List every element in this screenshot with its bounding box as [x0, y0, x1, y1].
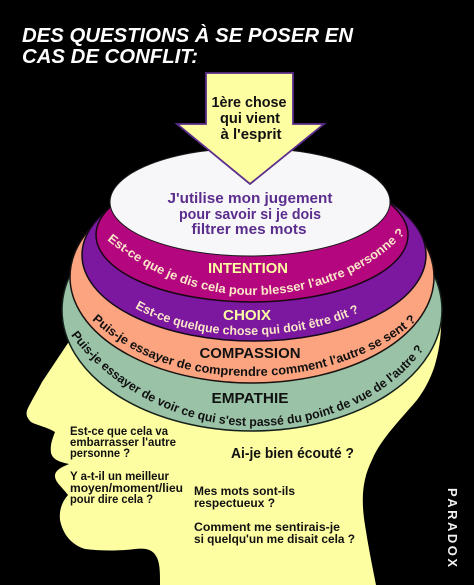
compassion label: COMPASSION [200, 346, 300, 362]
head shape [27, 280, 441, 585]
layer: intention [96, 168, 408, 302]
arrow text: 1ère chose [212, 95, 286, 111]
intention question: Est-ce que je dis cela pour blesser l'autre personne ? [108, 228, 403, 296]
question: meilleur moyen: moyen/moment/lieu [70, 481, 183, 495]
layer: jugement [110, 148, 390, 256]
jugement text [168, 190, 332, 238]
question: meilleur moyen [70, 469, 183, 506]
question: embarrasser: Est-ce que cela va [70, 424, 168, 438]
layer: empathie [62, 189, 442, 431]
question: comment me sentirais-je: Comment me sentirais-je [194, 520, 340, 534]
compassion question: Puis-je essayer de comprendre comment l'autre se sent ? [92, 314, 414, 378]
empathie question: Puis-je essayer de voir ce qui s'est passé du point de vue de l'autre ? [71, 330, 422, 429]
question: mots respectueux: respectueux ? [194, 496, 275, 510]
question: bien écouté: Ai-je bien écouté ? [231, 446, 354, 462]
question: embarrasser: embarrasser l'autre [70, 435, 176, 449]
jugement text: pour savoir si je dois [179, 206, 321, 223]
question: comment me sentirais-je: si quelqu'un me disait cela ? [194, 532, 355, 546]
choix label: CHOIX [223, 308, 271, 324]
title: CAS DE CONFLIT: [22, 45, 198, 68]
question: mots respectueux [194, 484, 295, 510]
arrow text: qui vient [220, 111, 280, 127]
empathie label: EMPATHIE [212, 391, 289, 407]
jugement text: J'utilise mon jugement [168, 190, 332, 207]
question: embarrasser: personne ? [70, 446, 130, 460]
arrow text [212, 95, 286, 143]
question: mots respectueux: Mes mots sont-ils [194, 484, 295, 498]
title [22, 24, 354, 68]
question: meilleur moyen: Y a-t-il un meilleur [70, 469, 169, 483]
jugement text: filtrer mes mots [192, 221, 306, 238]
arrow text: à l'esprit [220, 127, 282, 143]
arrow [177, 73, 324, 184]
intention label: INTENTION [208, 261, 288, 277]
question: meilleur moyen: pour dire cela ? [70, 492, 153, 506]
choix question: Est-ce quelque chose qui doit être dit ? [136, 300, 356, 337]
layer: compassion [70, 171, 434, 383]
layer: choix [82, 169, 426, 341]
question: comment me sentirais-je [194, 520, 355, 546]
question: embarrasser [70, 424, 176, 460]
brand: paradox: PARADOX [445, 488, 460, 567]
title: DES QUESTIONS À SE POSER EN [22, 24, 354, 47]
